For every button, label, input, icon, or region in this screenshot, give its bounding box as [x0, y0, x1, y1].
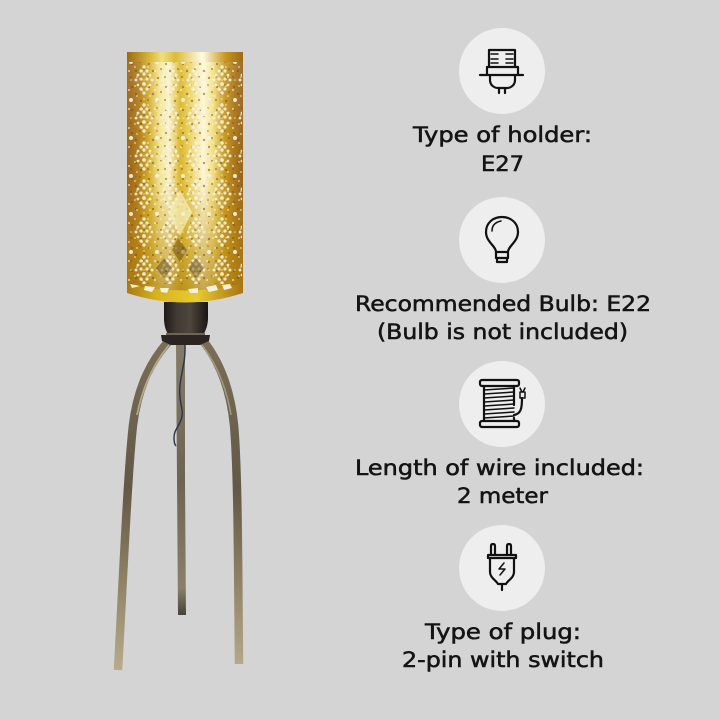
label: length of wire: Length of wire included: — [355, 456, 644, 480]
lamp collar — [161, 302, 210, 345]
label: type of holder: E27 — [481, 152, 524, 176]
lamp shade — [127, 52, 243, 302]
spec: plug — [402, 525, 604, 672]
icon: two-pin plug — [459, 525, 545, 611]
label: type of plug: Type of plug: — [424, 620, 581, 644]
floor lamp photo — [118, 52, 243, 670]
icon: wire spool — [459, 361, 545, 447]
spec: bulb — [355, 197, 651, 344]
label: type of holder: Type of holder: — [412, 123, 592, 147]
label: recommended bulb: Recommended Bulb: E22 — [355, 292, 651, 316]
icon: light bulb — [459, 197, 545, 283]
label: recommended bulb: (Bulb is not included) — [377, 320, 628, 344]
label: length of wire: 2 meter — [457, 484, 548, 508]
spec: wire — [355, 361, 644, 508]
lamp tripod legs — [118, 342, 239, 670]
icon: lamp holder — [459, 28, 545, 114]
spec: holder — [412, 28, 592, 176]
label: type of plug: 2-pin with switch — [402, 648, 604, 672]
power wire — [174, 345, 185, 446]
